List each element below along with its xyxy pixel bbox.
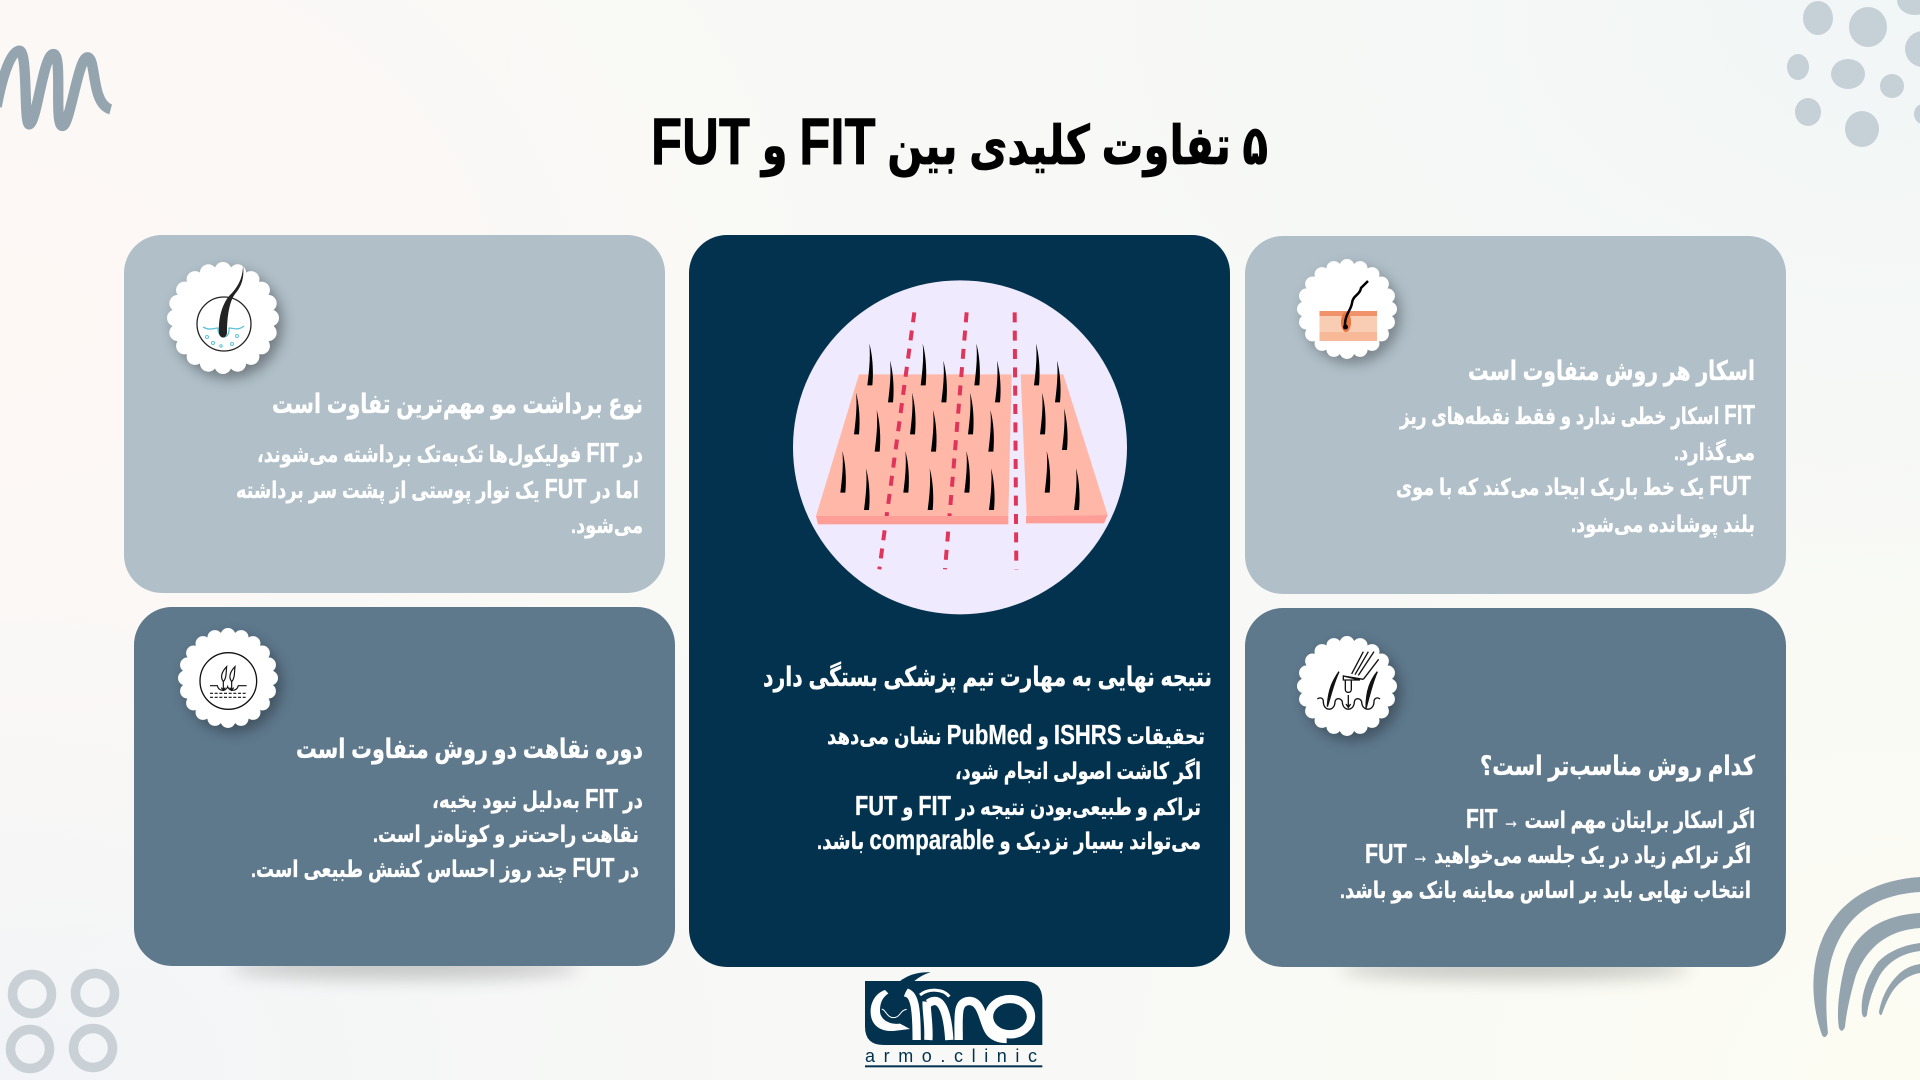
card background xyxy=(1245,236,1786,594)
body text: FUT یک خط باریک ایجاد می‌کند که با موی xyxy=(1396,470,1751,501)
icon: follicles and comb badge xyxy=(1304,644,1390,728)
logo text: armo.clinic xyxy=(865,1046,1042,1066)
body text: انتخاب نهایی باید بر اساس معاینه بانک مو باشد. xyxy=(1340,877,1751,904)
card background xyxy=(689,235,1230,967)
body text: تراکم و طبیعی‌بودن نتیجه در FIT و FUT xyxy=(855,790,1201,821)
panel: final result xyxy=(689,235,1230,967)
heading: کدام روش مناسب‌تر است؟ xyxy=(1480,751,1755,782)
illustration: strip of scalp with dashed cut lines xyxy=(793,280,1127,614)
heading: اسکار هر روش متفاوت است xyxy=(1468,356,1755,387)
body text: بلند پوشانده می‌شود. xyxy=(1571,511,1755,538)
shadow under bottom left card xyxy=(230,955,580,979)
heading: دوره نقاهت دو روش متفاوت است xyxy=(296,734,643,765)
icon: hair follicle badge xyxy=(176,265,270,366)
body text xyxy=(251,783,643,883)
body text: در FIT فولیکول‌ها تک‌به‌تک برداشته می‌شوند، xyxy=(257,437,643,468)
body text: تحقیقات ISHRS و PubMed نشان می‌دهد xyxy=(827,719,1205,750)
body text: اما در FUT یک نوار پوستی از پشت سر برداشته xyxy=(236,473,639,504)
decoration: arches bottom right xyxy=(1813,877,1920,1037)
body text: می‌گذارد. xyxy=(1674,439,1755,466)
decoration: rings bottom left xyxy=(10,974,114,1068)
decoration: dots top right xyxy=(1787,0,1920,147)
body text xyxy=(1340,803,1755,904)
body text: اگر تراکم زیاد در یک جلسه می‌خواهید → FUT xyxy=(1365,838,1751,869)
heading: نوع برداشت مو مهم‌ترین تفاوت است xyxy=(272,389,643,420)
panel: which method xyxy=(1245,608,1786,967)
body text: در FUT چند روز احساس کشش طبیعی است. xyxy=(251,852,639,883)
shadow under bottom right card xyxy=(1340,956,1690,980)
body text xyxy=(817,719,1205,855)
logo mark xyxy=(865,972,1042,1067)
panel: scars xyxy=(1245,236,1786,594)
heading: نتیجه نهایی به مهارت تیم پزشکی بستگی دارد xyxy=(763,661,1212,693)
panel: harvest type xyxy=(124,235,665,593)
card background xyxy=(1245,608,1786,967)
logo: armo clinic xyxy=(865,972,1042,1067)
card background xyxy=(124,235,665,593)
title: ۵ تفاوت کلیدی بین FIT و FUT xyxy=(651,104,1268,178)
panel: recovery period xyxy=(134,607,675,966)
body text: می‌تواند بسیار نزدیک و comparable باشد. xyxy=(817,824,1201,855)
body text: در FIT به‌دلیل نبود بخیه، xyxy=(432,783,643,814)
body text: اگر کاشت اصولی انجام شود، xyxy=(955,758,1201,785)
decoration: squiggle top left xyxy=(0,51,111,126)
icon: recovery badge xyxy=(186,636,270,720)
body text: FIT اسکار خطی ندارد و فقط نقطه‌های ریز xyxy=(1399,399,1755,430)
body text: اگر اسکار برایتان مهم است → FIT xyxy=(1466,803,1755,834)
body text: نقاهت راحت‌تر و کوتاه‌تر است. xyxy=(373,821,639,848)
body text xyxy=(1396,399,1755,538)
body text xyxy=(236,437,643,539)
body text: می‌شود. xyxy=(571,512,643,539)
card background xyxy=(134,607,675,966)
icon: skin and hair badge xyxy=(1304,266,1390,352)
